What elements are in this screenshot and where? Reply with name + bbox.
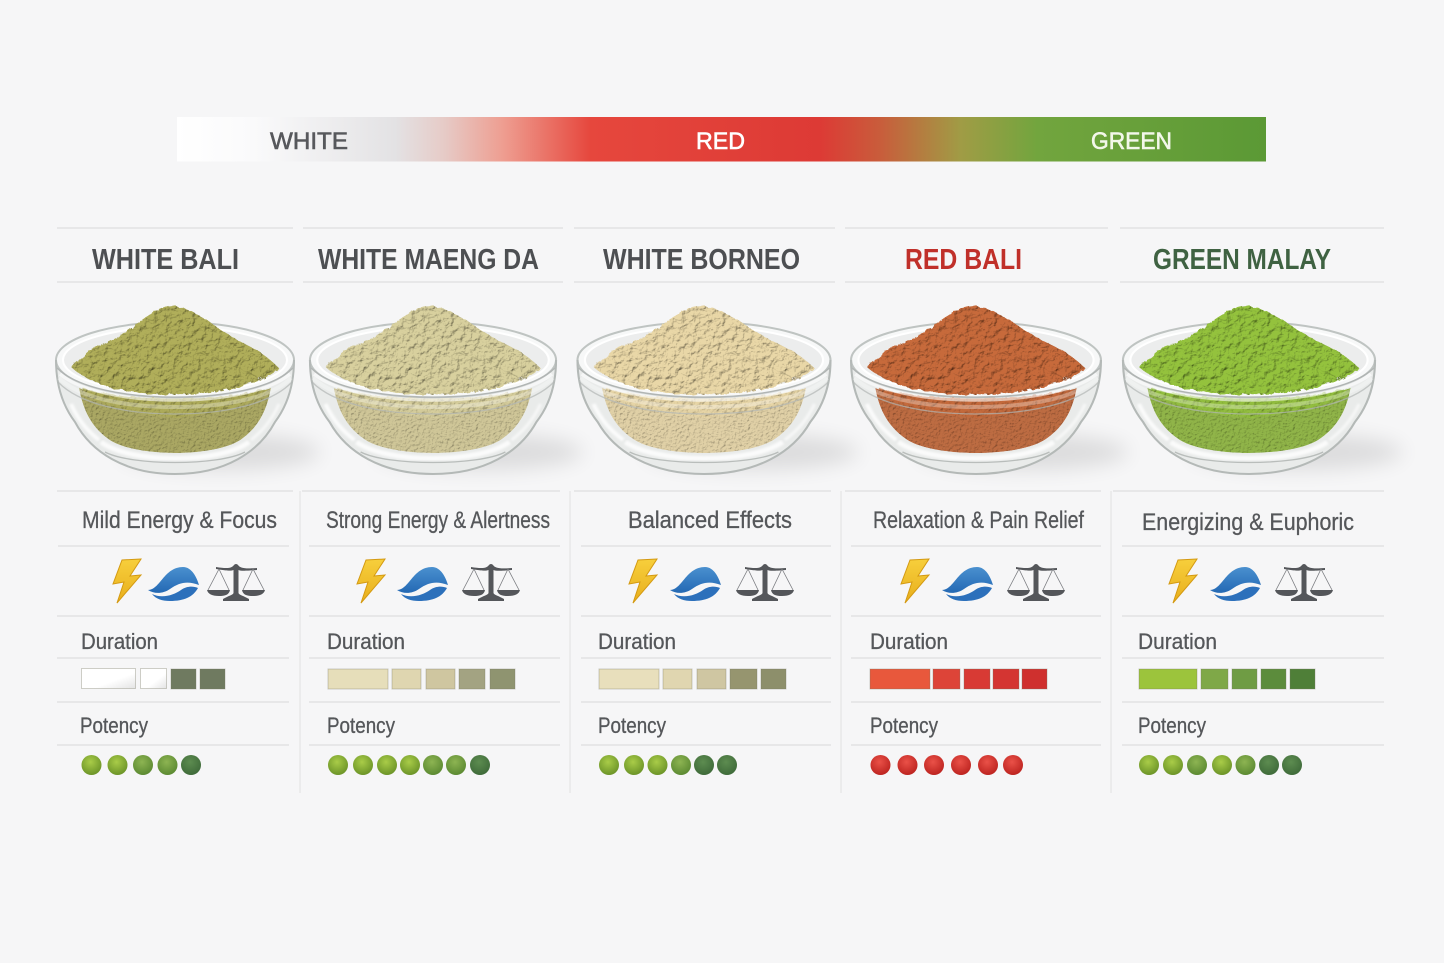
icons: bolt, wave, scale bbox=[629, 559, 794, 603]
label: GREEN: GREEN bbox=[1091, 128, 1172, 155]
potency label: Potency bbox=[327, 713, 395, 738]
effect text: Balanced Effects bbox=[628, 507, 792, 534]
effect text: Mild Energy & Focus bbox=[82, 507, 277, 534]
panel: White Borneo bbox=[574, 228, 858, 775]
potency dots bbox=[82, 755, 201, 775]
potency dots bbox=[328, 755, 490, 775]
bowl of powder bbox=[578, 306, 858, 474]
potency dots bbox=[1139, 755, 1302, 775]
panel: White Maeng Da bbox=[302, 228, 583, 775]
potency dots bbox=[599, 755, 737, 775]
duration label: Duration bbox=[327, 629, 405, 654]
bowl of powder bbox=[851, 306, 1128, 474]
potency label: Potency bbox=[870, 713, 938, 738]
duration bar bbox=[1139, 669, 1315, 689]
potency label: Potency bbox=[80, 713, 148, 738]
heading: White Bali: WHITE BALI bbox=[92, 244, 239, 276]
bowl of powder bbox=[56, 306, 320, 474]
icons: bolt, wave, scale bbox=[113, 559, 265, 603]
panel: Red Bali bbox=[845, 228, 1128, 775]
heading: Green Malay: GREEN MALAY bbox=[1153, 244, 1331, 276]
duration bar bbox=[82, 668, 225, 689]
effect text: Relaxation & Pain Relief bbox=[873, 507, 1084, 534]
bowl of powder bbox=[310, 306, 583, 474]
icons: bolt, wave, scale bbox=[901, 559, 1065, 603]
icons: bolt, wave, scale bbox=[357, 559, 520, 603]
bowl of powder bbox=[1123, 306, 1403, 474]
heading: Red Bali: RED BALI bbox=[905, 244, 1022, 276]
duration label: Duration bbox=[1138, 629, 1217, 654]
duration bar bbox=[599, 669, 786, 689]
icons: bolt, wave, scale bbox=[1169, 559, 1333, 603]
duration label: Duration bbox=[598, 629, 676, 654]
potency label: Potency bbox=[1138, 713, 1206, 738]
heading: White Borneo: WHITE BORNEO bbox=[603, 244, 800, 276]
duration label: Duration bbox=[870, 629, 948, 654]
effect text: Strong Energy & Alertness bbox=[326, 507, 550, 534]
heading: White Maeng Da: WHITE MAENG DA bbox=[318, 244, 539, 276]
panel: Green Malay bbox=[1113, 228, 1403, 775]
duration label: Duration bbox=[81, 629, 158, 654]
effect text: Energizing & Euphoric bbox=[1142, 509, 1354, 536]
duration bar bbox=[328, 669, 515, 689]
potency dots bbox=[870, 755, 1023, 775]
label: RED: RED bbox=[696, 128, 745, 155]
panel: White Bali bbox=[56, 228, 320, 775]
spectrum bar: white to red to green bbox=[177, 117, 1266, 162]
duration bar bbox=[870, 669, 1047, 689]
label: WHITE: WHITE bbox=[270, 128, 348, 155]
potency label: Potency bbox=[598, 713, 666, 738]
